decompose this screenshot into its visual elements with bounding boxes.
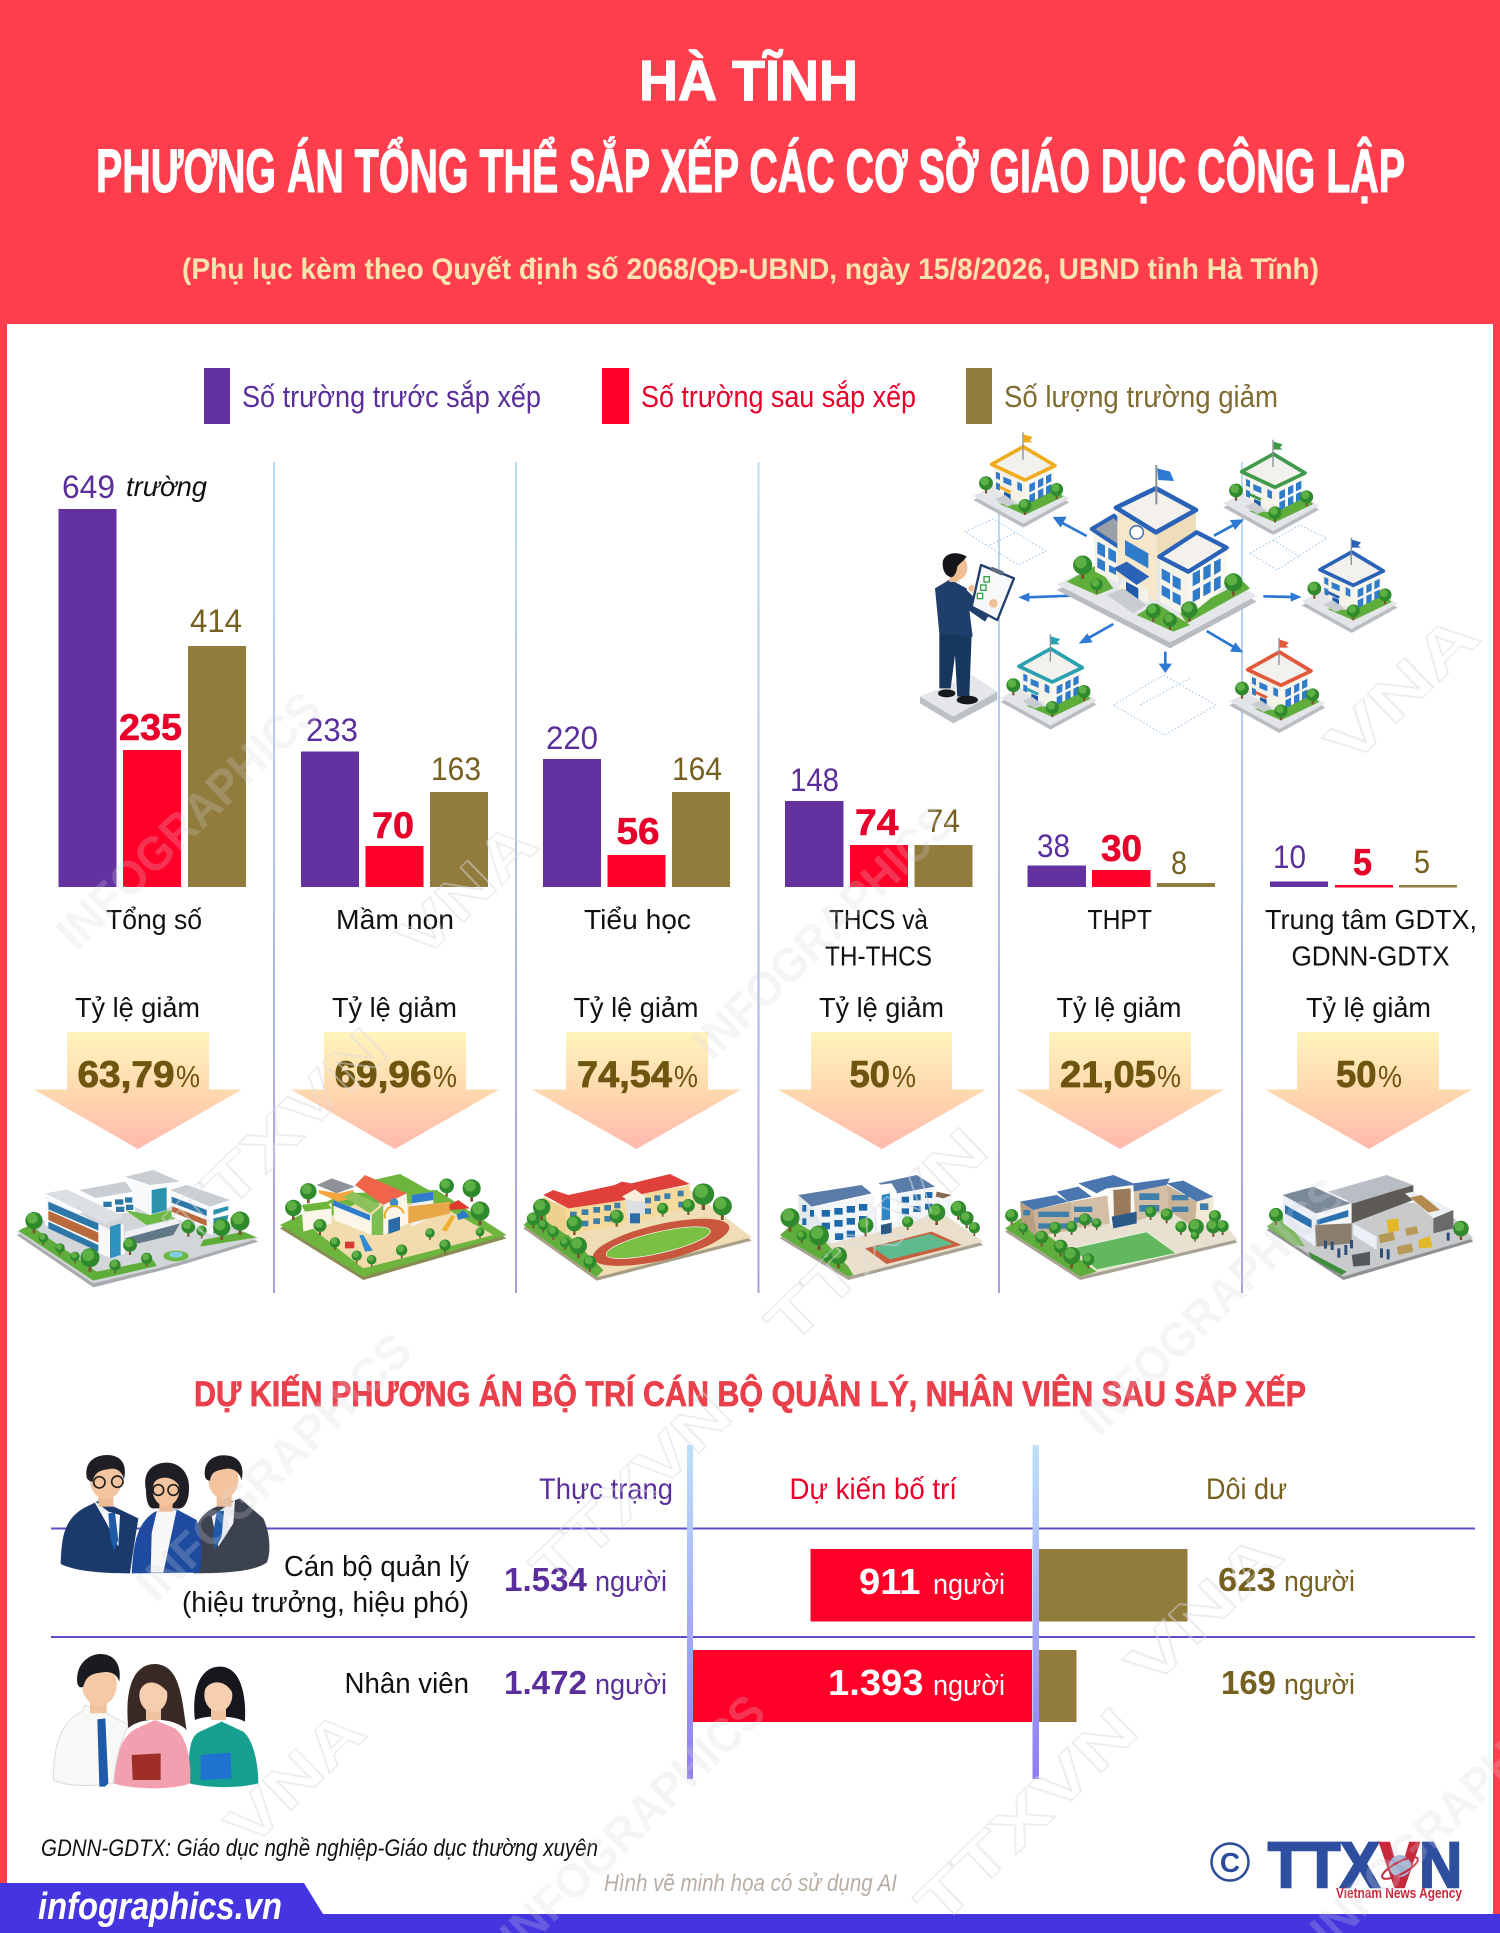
- reduction rate: THCS: Tỷ lệ giảm: [819, 992, 944, 1023]
- current value: 1.472: [504, 1664, 587, 1701]
- bars: [785, 801, 972, 887]
- small school: blue: [1302, 538, 1398, 633]
- bars: [1028, 866, 1215, 887]
- category label: Trung tâm GDTX,: [1265, 904, 1477, 935]
- illustration: vocational training centre: [1267, 1175, 1473, 1280]
- chart: Tổng số: [58, 469, 246, 935]
- illustration: managers: [61, 1455, 269, 1573]
- text: INFOGRAPHICS: [47, 682, 332, 960]
- reduction rate: Tổng số: %: [176, 1059, 200, 1094]
- logo: TTXVN: [1212, 1829, 1463, 1902]
- value: reduced: 163: [431, 751, 481, 787]
- arrows: [1018, 517, 1302, 673]
- text: VNA: [212, 1697, 378, 1859]
- row label: Cán bộ quản lý: [284, 1551, 469, 1583]
- agency name: Vietnam News Agency: [1336, 1885, 1463, 1902]
- category label: TH-THCS: [825, 940, 932, 972]
- surplus value: [1221, 1664, 1355, 1701]
- category label: Mầm non: [336, 904, 454, 935]
- current value: người: [595, 1566, 667, 1598]
- current value: người: [595, 1669, 667, 1701]
- illustration: large school campus: [17, 1170, 258, 1287]
- category label: Tiểu học: [584, 904, 691, 935]
- planned value: người: [933, 1569, 1005, 1601]
- arrow: [1265, 1032, 1472, 1149]
- legend item: reduced: [966, 368, 1278, 424]
- chart: Trung tâm GDTX, GDNN-GDTX: [1265, 839, 1477, 972]
- value: after: 235: [119, 707, 182, 748]
- surplus value: người: [1284, 1669, 1355, 1701]
- reduction rate: Trung tâm: Tỷ lệ giảm: [1306, 992, 1431, 1023]
- reduction rate: Mầm non: Tỷ lệ giảm: [332, 992, 457, 1023]
- column header: current: Thực trạng: [539, 1473, 673, 1506]
- surplus value: [1218, 1561, 1355, 1598]
- legend: [204, 368, 1278, 424]
- text: TTXVN: [902, 1695, 1150, 1933]
- current value: [504, 1561, 667, 1598]
- legend item: before: Số trường trước sắp xếp: [242, 379, 541, 414]
- title: province: HÀ TĨNH: [639, 49, 858, 113]
- planned value: [828, 1662, 1005, 1703]
- reduction rate: Trung tâm: 50: [1336, 1054, 1376, 1095]
- reduction rate: Mầm non: %: [433, 1059, 457, 1094]
- reduction rate: THPT: %: [1157, 1059, 1181, 1094]
- chart: Mầm non: [301, 712, 488, 935]
- current value: 1.534: [504, 1561, 588, 1598]
- small school: teal: [1001, 634, 1097, 730]
- chart: THPT: [1028, 828, 1215, 935]
- arrow: [34, 1032, 242, 1149]
- dotted plots: [965, 519, 1327, 735]
- category label: THPT: [1088, 904, 1152, 935]
- reduction rate: Tổng số: 63,79: [78, 1054, 174, 1095]
- reduction rate: Trung tâm: %: [1378, 1059, 1402, 1094]
- value: after: 56: [616, 811, 660, 852]
- text: INFOGRAPHICS: [127, 1324, 423, 1612]
- reduction rate: THCS: %: [892, 1059, 916, 1094]
- reduction rate: THCS: [778, 992, 986, 1149]
- row: managers: [182, 1549, 1355, 1622]
- value: reduced: 5: [1414, 844, 1430, 880]
- value: after: 70: [372, 805, 414, 846]
- value: after: 74: [855, 802, 899, 843]
- text: INFOGRAPHICS: [1070, 1168, 1355, 1446]
- value: before: 649: [62, 469, 115, 505]
- surplus value: 169: [1221, 1664, 1276, 1701]
- bars: [58, 509, 246, 887]
- value: after: 5: [1353, 842, 1372, 883]
- row label: [182, 1551, 469, 1619]
- section heading: DỰ KIẾN PHƯƠNG ÁN BỘ TRÍ CÁN BỘ QUẢN LÝ, NHÂN VIÊN SAU SẮP XẾP: [194, 1374, 1306, 1414]
- planned value: 1.393: [828, 1662, 924, 1703]
- reduction rate: Trung tâm: [1265, 992, 1472, 1149]
- AI illustration note: Hình vẽ minh họa có sử dụng AI: [604, 1870, 897, 1897]
- value: reduced: 414: [190, 603, 242, 639]
- reduction rate: Tiểu học: [532, 992, 741, 1149]
- illustration: kindergarten: [280, 1174, 507, 1280]
- text: INFOGRAPHICS: [683, 796, 964, 1070]
- row: staff: [344, 1650, 1355, 1722]
- value: before: 233: [306, 712, 358, 748]
- legend item: reduced: Số lượng trường giảm: [1004, 379, 1278, 414]
- chart: THCS và TH-THCS: [785, 762, 972, 972]
- person with clipboard: [920, 553, 1014, 723]
- illustration: upper secondary school: [1005, 1175, 1237, 1280]
- reduction rate: THPT: Tỷ lệ giảm: [1056, 992, 1182, 1023]
- bars: [543, 759, 730, 887]
- text: VNA: [1112, 1519, 1296, 1699]
- reduction rate: Tổng số: [34, 992, 242, 1149]
- row label: (hiệu trưởng, hiệu phó): [182, 1587, 469, 1619]
- planned value: 911: [859, 1561, 920, 1602]
- legend item: before: [204, 368, 541, 424]
- value: reduced: 164: [672, 751, 722, 787]
- copyright mark: C: [1220, 1847, 1240, 1878]
- arrow: [778, 1032, 986, 1149]
- subtitle: (Phụ lục kèm theo Quyết định số 2068/QĐ-UBND, ngày 15/8/2026, UBND tỉnh Hà Tĩnh): [182, 253, 1319, 286]
- chart: Tiểu học: [543, 720, 730, 935]
- illustration: staff: [53, 1654, 258, 1788]
- value: before: 10: [1273, 839, 1306, 875]
- copyright mark: [1212, 1844, 1248, 1880]
- value: reduced: 74: [926, 803, 960, 839]
- legend item: after: [602, 368, 916, 424]
- text: TTXVN: [152, 1015, 400, 1257]
- reduction rate: Tổng số: Tỷ lệ giảm: [75, 992, 200, 1023]
- value: reduced: 8: [1171, 845, 1187, 881]
- row label: Nhân viên: [344, 1668, 469, 1700]
- text: VNA: [1312, 601, 1492, 777]
- text: TTXVN: [517, 1379, 744, 1601]
- illustration: school network restructuring: [920, 432, 1398, 735]
- planned value: người: [933, 1670, 1005, 1702]
- arrow: [291, 1032, 499, 1149]
- current value: [504, 1664, 667, 1701]
- bars: [301, 752, 488, 887]
- small school: orange: [1229, 638, 1325, 733]
- footnote: GDNN-GDTX: Giáo dục nghề nghiệp-Giáo dục thường xuyên: [41, 1835, 598, 1862]
- planned bar: [693, 1650, 1032, 1722]
- category label: [1265, 904, 1477, 972]
- value: before: 38: [1037, 828, 1070, 864]
- reduction rate: THPT: [1016, 992, 1224, 1149]
- arrow: [532, 1032, 741, 1149]
- small school: yellow: [973, 432, 1069, 528]
- surplus value: 623: [1218, 1561, 1276, 1598]
- value: after: 30: [1101, 828, 1142, 869]
- bars: [1270, 882, 1457, 888]
- small school: green: [1223, 440, 1319, 535]
- unit note: trường: [126, 471, 207, 502]
- text: TTXVN: [752, 1115, 1000, 1357]
- reduction rate: Mầm non: [291, 992, 499, 1149]
- planned value: [859, 1561, 1005, 1602]
- globe: [1380, 1853, 1420, 1883]
- arrow: [1016, 1032, 1224, 1149]
- central school: [1057, 465, 1257, 648]
- surplus bar: [1039, 1650, 1076, 1722]
- reduction rate: THCS: 50: [850, 1054, 890, 1095]
- footer tab: site name: infographics.vn: [38, 1886, 282, 1928]
- surplus bar: [1039, 1549, 1188, 1622]
- illustration: lower secondary school: [780, 1175, 983, 1280]
- category label: Tổng số: [106, 904, 202, 935]
- legend item: after: Số trường sau sắp xếp: [641, 379, 916, 414]
- text: VNA: [384, 809, 550, 971]
- reduction rate: Mầm non: 69,96: [334, 1054, 432, 1095]
- column header: planned: Dự kiến bố trí: [790, 1473, 958, 1506]
- value: before: 220: [546, 720, 598, 756]
- planned bar: [810, 1549, 1032, 1622]
- illustration: primary school: [523, 1174, 752, 1281]
- category label: [825, 904, 932, 972]
- category label: GDNN-GDTX: [1292, 940, 1450, 972]
- column header: surplus: Dôi dư: [1206, 1473, 1287, 1506]
- reduction rate: Tiểu học: %: [674, 1059, 698, 1094]
- reduction rate: THPT: 21,05: [1060, 1054, 1156, 1095]
- wordmark: TTXVN: [1268, 1829, 1462, 1901]
- footer band: [0, 1914, 1500, 1933]
- value: before: 148: [790, 762, 839, 798]
- reduction rate: Tiểu học: 74,54: [577, 1054, 672, 1095]
- category label: THCS và: [829, 904, 928, 935]
- reduction rate: Tiểu học: Tỷ lệ giảm: [574, 992, 698, 1023]
- surplus value: người: [1284, 1566, 1355, 1598]
